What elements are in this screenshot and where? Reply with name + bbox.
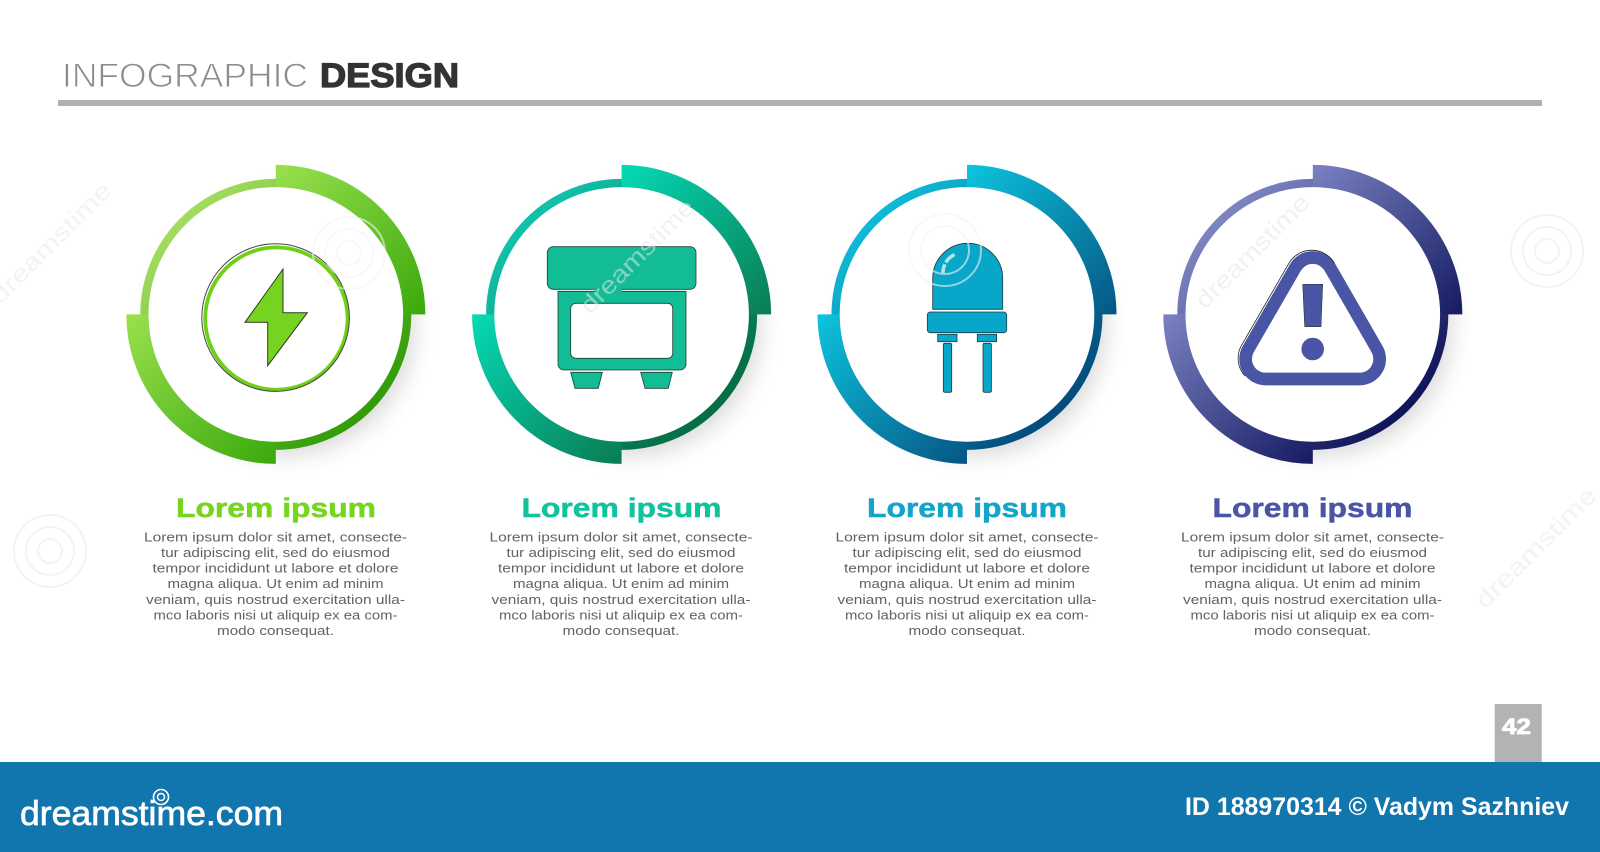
text: warning: mco laboris nisi ut aliquip ex ea com- <box>1190 607 1434 622</box>
text: fuse: veniam, quis nostrud exercitation ulla- <box>492 592 750 607</box>
icon: lightning in circle <box>202 244 349 391</box>
text: LED <box>836 530 1098 638</box>
ring: fuse <box>483 176 760 454</box>
ring: warning <box>1174 176 1451 454</box>
text: warning: veniam, quis nostrud exercitation ulla- <box>1183 592 1442 607</box>
title: warning: Lorem ipsum <box>1212 493 1412 523</box>
text: LED: tempor incididunt ut labore et dolore <box>844 561 1090 576</box>
text: power: Lorem ipsum dolor sit amet, consecte- <box>144 530 407 544</box>
text: power: tur adipiscing elit, sed do eiusmod <box>161 545 390 560</box>
panel: fuse <box>483 176 760 638</box>
text: LED: Lorem ipsum dolor sit amet, consecte- <box>836 530 1098 544</box>
footer logo: dreamstime.com <box>20 795 283 833</box>
text: LED: tur adipiscing elit, sed do eiusmod <box>852 545 1082 560</box>
panel: LED <box>828 176 1106 638</box>
text: fuse: magna aliqua. Ut enim ad minim <box>513 576 729 591</box>
heading: DESIGN <box>320 57 459 95</box>
text: warning: tempor incididunt ut labore et dolore <box>1190 561 1436 576</box>
heading: INFOGRAPHIC <box>62 57 308 95</box>
text: fuse: tur adipiscing elit, sed do eiusmod <box>506 545 736 560</box>
page number tab: 42 <box>1502 714 1531 739</box>
ring: LED <box>828 176 1106 454</box>
text: warning: modo consequat. <box>1254 623 1371 638</box>
footer credit: ID 188970314 © Vadym Sazhniev <box>1185 793 1569 821</box>
title: fuse: Lorem ipsum <box>522 493 722 523</box>
text: fuse: Lorem ipsum dolor sit amet, consecte- <box>490 530 752 544</box>
text: LED: modo consequat. <box>908 623 1026 638</box>
title: power: Lorem ipsum <box>176 493 376 523</box>
text: fuse: tempor incididunt ut labore et dolore <box>498 561 744 576</box>
watermark: dreamstime <box>1190 189 1315 314</box>
text: warning <box>1181 530 1444 638</box>
heading <box>62 57 459 95</box>
footer bar <box>0 762 1600 852</box>
text: fuse <box>490 530 752 638</box>
text: LED: mco laboris nisi ut aliquip ex ea com- <box>845 607 1089 622</box>
text: power: modo consequat. <box>217 623 334 638</box>
text: fuse: mco laboris nisi ut aliquip ex ea com- <box>499 607 743 622</box>
panel: warning <box>1174 176 1451 638</box>
text: warning: tur adipiscing elit, sed do eiusmod <box>1198 545 1427 560</box>
title: LED: Lorem ipsum <box>867 493 1067 523</box>
icon: LED diode <box>927 243 1007 392</box>
text: power: tempor incididunt ut labore et dolore <box>152 561 398 576</box>
text: warning: Lorem ipsum dolor sit amet, consecte- <box>1181 530 1444 544</box>
panel: power <box>137 176 414 638</box>
text: power: veniam, quis nostrud exercitation ulla- <box>146 592 405 607</box>
text: LED: veniam, quis nostrud exercitation ulla- <box>838 592 1096 607</box>
header rule <box>58 100 1542 106</box>
icon: warning triangle <box>1238 250 1380 379</box>
watermark: dreamstime <box>575 194 700 319</box>
text: power: mco laboris nisi ut aliquip ex ea com- <box>154 607 398 622</box>
text: warning: magna aliqua. Ut enim ad minim <box>1204 576 1420 591</box>
text: power: magna aliqua. Ut enim ad minim <box>168 576 384 591</box>
text: LED: magna aliqua. Ut enim ad minim <box>859 576 1075 591</box>
text: fuse: modo consequat. <box>562 623 680 638</box>
page number tab <box>1495 704 1542 762</box>
ring: power <box>137 176 414 454</box>
watermark <box>0 177 1600 614</box>
text: power <box>144 530 407 638</box>
watermark: dreamstime <box>1470 482 1600 614</box>
icon: fuse <box>547 247 696 388</box>
